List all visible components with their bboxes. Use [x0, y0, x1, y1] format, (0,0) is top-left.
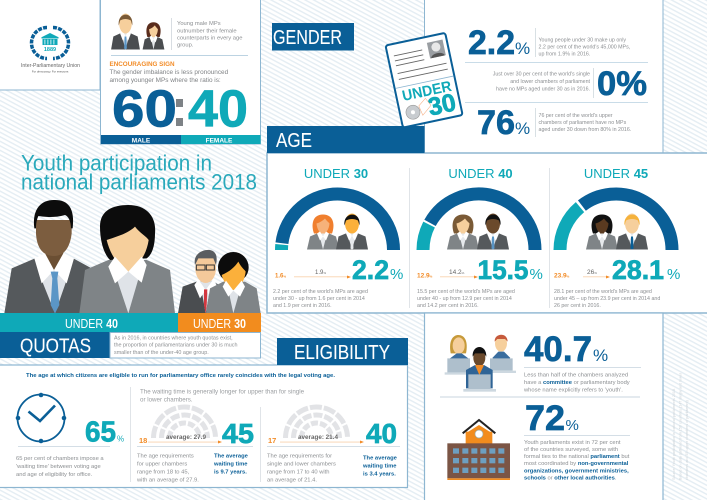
text: under 30: 2.2 per cent of the world's MPs are aged	[273, 289, 368, 295]
text: eligibility headline: The age at which citizens are eligible to run for parliamentary office rarely coincides with the legal voting age.	[26, 373, 335, 379]
stat: 76%: 76 per cent of the world's upper	[538, 113, 613, 119]
column: under 40	[417, 166, 543, 309]
stat: 72%: 72	[525, 399, 565, 438]
title: national parliaments 2018	[21, 170, 257, 194]
stat: 65%: %	[117, 434, 124, 444]
heading: eligibility: ELIGIBILITY	[294, 342, 390, 364]
heading: age: AGE	[276, 130, 312, 152]
icon: school building	[447, 420, 510, 480]
text: upper chambers: range from 18 to 45,	[137, 470, 190, 476]
text: youth parliaments: schools or other local authorities.	[524, 476, 616, 482]
callout: lower waiting time: waiting time	[362, 464, 397, 470]
heading: age	[267, 126, 424, 153]
stat: 76%: chambers of parliament have no MPs	[538, 120, 627, 126]
document icon: under 30	[386, 33, 463, 128]
callout: upper waiting time: is 9.7 years.	[214, 470, 247, 476]
column: under 30: UNDER 30	[304, 166, 368, 181]
source note: Based on data gathered from 150 countries (147 single and lower	[678, 372, 682, 480]
trend: 12.9 to 15.5: 12.9%	[417, 272, 433, 280]
text: under 40: 15.5 per cent of the world's MPs are aged	[417, 289, 515, 295]
stat: 0%: 0%	[597, 65, 647, 103]
panel: youth bodies	[424, 313, 663, 500]
bar: male: MALE	[132, 138, 151, 144]
text: under 40: and 14.2 per cent in 2016.	[417, 303, 479, 309]
text: young male MPs: outnumber their female	[177, 28, 237, 34]
text: young male MPs: group.	[177, 43, 194, 49]
text: upper chambers: The age requirements	[137, 454, 194, 460]
icon: man and woman MPs	[111, 14, 164, 50]
trend: 12.9 to 15.5	[417, 255, 543, 285]
panel: age	[267, 153, 707, 313]
text: waiting time intro: The waiting time is generally longer for upper than for single	[140, 388, 305, 396]
chart: single and lower chambers range: 40	[366, 418, 397, 449]
trend: 12.9 to 15.5: 15.5	[478, 255, 528, 285]
trend: 1.6 to 2.2: 1.9%	[315, 270, 326, 276]
stat: 40.7%: %	[593, 346, 608, 365]
callout: upper waiting time: waiting time	[213, 462, 248, 468]
trend: 1.6 to 2.2	[275, 255, 403, 285]
trend: 23.9 to 28.1	[554, 255, 680, 285]
heading: eligibility	[277, 338, 408, 365]
heading: quotas: QUOTAS	[20, 336, 91, 358]
stat: 0%: have no MPs aged under 30 as in 2016.	[496, 86, 590, 92]
icon: MPs at laptops	[445, 335, 516, 392]
callout: upper waiting time: The average	[214, 454, 249, 460]
trend: 1.6 to 2.2: %	[390, 266, 403, 283]
trend: 12.9 to 15.5: %	[530, 266, 543, 283]
stat: 76%: aged under 30 down from 80% in 2016.	[538, 127, 631, 133]
stat: 2.2%: %	[515, 39, 530, 58]
band: under 40	[0, 313, 178, 332]
bar: male	[101, 135, 181, 144]
icon: two young MPs	[307, 214, 368, 250]
callout: lower waiting time: is 3.4 years.	[363, 472, 396, 478]
text: committee: have a committee or parliamentary body	[524, 380, 630, 386]
text: committee: Less than half of the chambers analyzed	[524, 372, 628, 378]
document icon: under 30: 30	[426, 88, 459, 122]
trend: 1.6 to 2.2: 1.6%	[275, 274, 286, 280]
bar: female: FEMALE	[206, 138, 233, 144]
title: Youth participation in	[21, 150, 212, 176]
band: under 30	[178, 313, 261, 332]
column: under 45: UNDER 45	[584, 166, 648, 181]
stat: 72%: %	[566, 417, 579, 434]
stat: 76%	[477, 104, 631, 142]
tagline: For democracy. For everyone.	[32, 70, 69, 74]
text box: quotas	[110, 332, 260, 358]
text: single and lower chambers: range from 17 to 40 with	[267, 470, 330, 476]
stat: 76%: 76	[477, 104, 515, 142]
source note: Source: Youth participation in national parliaments 2018.	[672, 388, 676, 480]
text: under 45: 26 per cent in 2016.	[554, 303, 601, 309]
number: 60: 60	[112, 80, 177, 138]
text: upper chambers: for upper chambers	[137, 462, 187, 468]
stat: 2.2%: 2.2 per cent of the world's 45,000 MPs,	[538, 44, 630, 50]
panel: eligibility	[0, 365, 408, 488]
text: under 45: under 45 – up from 23.9 per cent in 2014 and	[554, 296, 660, 302]
text: young male MPs: counterparts in every age	[177, 36, 242, 42]
text: gender imbalance: among younger MPs where the ratio is:	[110, 77, 221, 84]
stat: 2.2%: up from 1.9% in 2016.	[538, 52, 590, 58]
text: youth parliaments: organizations, government ministries,	[524, 468, 629, 474]
text: single and lower chambers: The age requirements for	[267, 454, 332, 460]
text box: quotas: the proportion of parliamentarians under 30 is much	[114, 342, 237, 348]
source note: chambers and 55 upper chambers of parliament)	[685, 400, 689, 480]
heading: gender: GENDER	[273, 27, 342, 49]
organisation name: Inter-Parliamentary Union	[21, 63, 80, 69]
chart: upper chambers range: 18	[139, 436, 147, 445]
trend: 12.9 to 15.5: 14.2%	[449, 269, 465, 276]
text: committee: whose name explicitly refers to 'youth'.	[523, 388, 623, 394]
text: waiting time share: 'waiting time' between voting age	[16, 464, 101, 470]
stat: 2.2%: 2.2	[468, 24, 515, 62]
chart: single and lower chambers range: 17	[268, 436, 276, 445]
icon: two MPs under 40	[447, 214, 509, 250]
stat: 0%: and lower chambers of parliament	[510, 79, 591, 85]
trend: 23.9 to 28.1: %	[667, 266, 680, 283]
text: under 45: 28.1 per cent of the world's MPs are aged	[554, 289, 652, 295]
text box: quotas: As in 2016, in countries where youth quotas exist,	[114, 336, 233, 342]
panel: logo	[0, 0, 100, 90]
text: gender imbalance: The gender imbalance is less pronounced	[110, 69, 229, 76]
chart: single and lower chambers range	[268, 407, 397, 449]
figure: man under 40	[4, 200, 92, 313]
illustration: under 40 and under 30 MPs	[4, 200, 261, 313]
figure: man under 30	[178, 250, 222, 313]
text: single and lower chambers: an average of 21.4.	[267, 478, 317, 484]
icon: IPU wreath logo: 1889	[44, 47, 56, 53]
heading: quotas	[0, 332, 110, 358]
icon: clock	[16, 393, 66, 443]
text: youth parliaments: Youth parliaments exist in 72 per cent	[524, 440, 621, 446]
text: upper chambers: with an average of 27.9.	[136, 478, 199, 484]
figure: woman under 30	[206, 252, 261, 313]
column: under 45	[554, 166, 680, 309]
column: under 40: UNDER 40	[448, 166, 513, 181]
text: youth parliaments: of the countries surveyed, some with	[524, 447, 618, 453]
callout: lower waiting time: The average	[363, 456, 398, 462]
stat: 2.2%	[468, 24, 630, 62]
text: under 40: under 40 - up from 12.9 per cent in 2014	[417, 296, 512, 302]
panel: under-30 statistics	[424, 0, 663, 153]
text: waiting time intro: or lower chambers.	[140, 396, 193, 404]
trend: 23.9 to 28.1: 23.9%	[554, 272, 570, 280]
heading: encouraging sign: ENCOURAGING SIGN	[110, 61, 175, 68]
trend: 1.6 to 2.2: 2.2	[352, 255, 389, 285]
chart: single and lower chambers range: average: 21.4	[298, 434, 338, 441]
document icon: under 30: UNDER	[401, 78, 453, 105]
text: waiting time share: and age of eligibility for office.	[16, 472, 93, 478]
gauge: 15.5%	[423, 194, 535, 250]
band: under 40: UNDER 40	[65, 317, 118, 331]
trend: 23.9 to 28.1: 28.1	[612, 255, 664, 285]
stat: 40.7%: 40.7	[524, 330, 592, 369]
gauge: 28.1%	[560, 194, 672, 250]
stat: 76%: %	[515, 119, 530, 138]
number: 40: 40	[188, 80, 248, 138]
stat: 0%: Just over 30 per cent of the world's single	[493, 72, 590, 78]
chart: upper chambers range: 45	[222, 418, 254, 449]
chart: upper chambers range	[139, 407, 254, 449]
text: youth parliaments: most coordinated by non-governmental	[524, 461, 628, 467]
gauge: 2.2%	[282, 194, 394, 250]
text box: quotas: smaller than of the under-40 age group.	[114, 350, 209, 356]
stat: 65%: 65	[85, 416, 116, 448]
text: young male MPs: Young male MPs	[177, 21, 221, 27]
figure: woman under 40	[79, 205, 175, 313]
text: under 30: and 1.9 per cent in 2016.	[273, 303, 332, 309]
text: youth parliaments: formal ties to the national parliament but	[524, 454, 629, 460]
text: under 30: under 30 - up from 1.6 per cent in 2014	[273, 296, 365, 302]
icon: two MPs under 45	[586, 214, 648, 250]
text: waiting time share: 65 per cent of chambers impose a	[16, 456, 104, 462]
column: under 30	[273, 166, 403, 309]
band: under 30: UNDER 30	[193, 317, 246, 331]
trend: 23.9 to 28.1: 26%	[587, 269, 597, 276]
bar: female	[181, 135, 260, 144]
panel: gender ratio card	[100, 0, 260, 144]
chart: upper chambers range: average: 27.9	[166, 434, 206, 441]
stat: 2.2%: Young people under 30 make up only	[538, 38, 626, 44]
colon	[176, 99, 183, 126]
stat: 0%	[493, 65, 647, 103]
text: single and lower chambers: single and lower chambers	[267, 462, 336, 468]
